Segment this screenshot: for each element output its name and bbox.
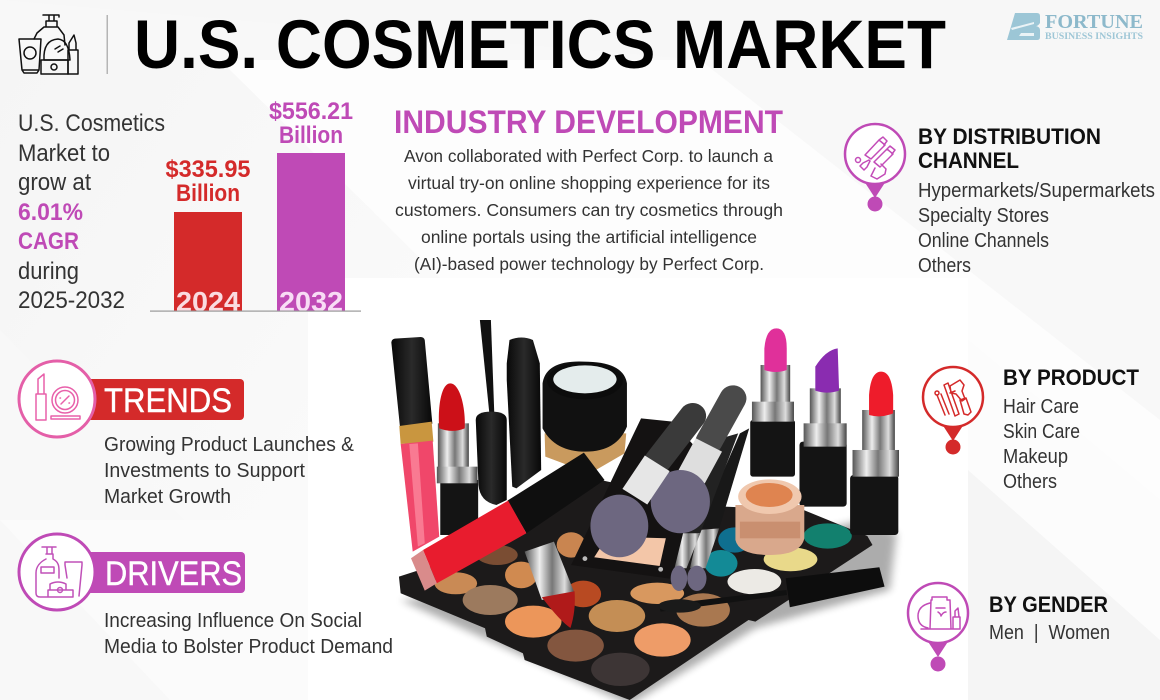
- industry development text: Avon collaborated with Perfect Corp. to launch a: [404, 146, 773, 166]
- list: Others: [1003, 471, 1057, 493]
- list: Skin Care: [1003, 421, 1080, 443]
- drivers label bar: DRIVERS: [105, 555, 242, 593]
- trends text: Market Growth: [104, 486, 231, 508]
- heading: BY GENDER: [989, 592, 1108, 617]
- industry development text: online portals using the artificial intelligence: [421, 227, 757, 247]
- drivers text: Increasing Influence On Social: [104, 610, 362, 632]
- CAGR text block: grow at: [18, 169, 91, 196]
- mascara wand: [476, 320, 507, 505]
- industry development heading: INDUSTRY DEVELOPMENT: [394, 104, 783, 140]
- industry development text: virtual try-on online shopping experience for its: [408, 173, 770, 193]
- trends label bar: TRENDS: [104, 382, 232, 420]
- heading: CHANNEL: [918, 148, 1019, 173]
- industry development text: customers. Consumers can try cosmetics through: [395, 200, 783, 220]
- diagonal lip gloss: [411, 453, 605, 591]
- CAGR text block: during: [18, 258, 79, 285]
- powder jar: [735, 479, 804, 555]
- trends text: [104, 434, 355, 508]
- icon: lipstick and mirror: [19, 361, 95, 437]
- icon: cosmetic bottles: [19, 534, 95, 610]
- trends text: Investments to Support: [104, 460, 305, 482]
- CAGR text block: 6.01%: [18, 199, 83, 226]
- logo: FORTUNE: [1045, 11, 1143, 33]
- heading: BY PRODUCT: [1003, 365, 1140, 390]
- bottom mascara: [658, 567, 885, 613]
- bar 2024: [166, 156, 250, 317]
- mascara tube: [507, 337, 541, 488]
- large brush 2: [651, 398, 733, 533]
- bar 2032: 2032: [279, 286, 343, 317]
- heading: BY DISTRIBUTION: [918, 124, 1101, 149]
- CAGR text block: [18, 110, 165, 314]
- logo: BUSINESS INSIGHTS: [1045, 32, 1143, 42]
- pin icon: makeup brushes: [923, 367, 983, 454]
- CAGR text block: U.S. Cosmetics: [18, 110, 165, 137]
- drivers text: Media to Bolster Product Demand: [104, 636, 393, 658]
- compact: [571, 418, 724, 579]
- large brush 1: [590, 416, 693, 557]
- shadows: [401, 520, 897, 700]
- lip gloss tube: [391, 337, 439, 552]
- bar 2024: 2024: [176, 286, 240, 317]
- CAGR text block: CAGR: [18, 228, 79, 255]
- bar 2024: $335.95: [166, 156, 250, 183]
- bar 2024: Billion: [176, 180, 240, 207]
- trends panel: [19, 361, 355, 508]
- lipstick red: [850, 372, 899, 535]
- title: U.S. COSMETICS MARKET: [134, 6, 946, 83]
- bar 2032: [269, 98, 353, 317]
- bar 2032: Billion: [279, 122, 343, 149]
- pin icon: brushes: [845, 124, 905, 212]
- thin brushes: [671, 428, 749, 591]
- header icon: cosmetics set: [0, 0, 78, 74]
- list: [918, 180, 1155, 277]
- trends text: Growing Product Launches &: [104, 434, 355, 456]
- list: Makeup: [1003, 446, 1068, 468]
- logo: [1007, 11, 1143, 42]
- list: Online Channels: [918, 230, 1049, 252]
- cosmetics photo illustration: [391, 320, 899, 700]
- heading: [918, 124, 1101, 173]
- list: [1003, 396, 1080, 493]
- list: Others: [918, 255, 971, 277]
- palette: [399, 480, 872, 700]
- pin icon: cream and lipstick: [908, 583, 968, 672]
- by gender panel: [908, 583, 1110, 672]
- bar chart: [150, 98, 361, 317]
- bar 2032: $556.21: [269, 98, 353, 125]
- lipstick pink: [750, 328, 795, 477]
- list: Men | Women: [989, 622, 1110, 644]
- drivers panel: [19, 534, 393, 658]
- drivers text: [104, 610, 393, 658]
- header divider: [106, 15, 108, 74]
- list: Specialty Stores: [918, 205, 1049, 227]
- foundation jar: [543, 362, 627, 473]
- industry development text: (AI)-based power technology by Perfect Corp.: [414, 254, 764, 274]
- red lipstick: [437, 383, 478, 535]
- CAGR text block: 2025-2032: [18, 287, 125, 314]
- lipstick purple: [799, 348, 847, 507]
- industry development text: [395, 146, 783, 274]
- by product panel: [923, 365, 1140, 493]
- CAGR text block: Market to: [18, 140, 110, 167]
- list: Hair Care: [1003, 396, 1079, 418]
- diagonal lipstick: [525, 542, 575, 628]
- by distribution channel panel: [845, 124, 1155, 277]
